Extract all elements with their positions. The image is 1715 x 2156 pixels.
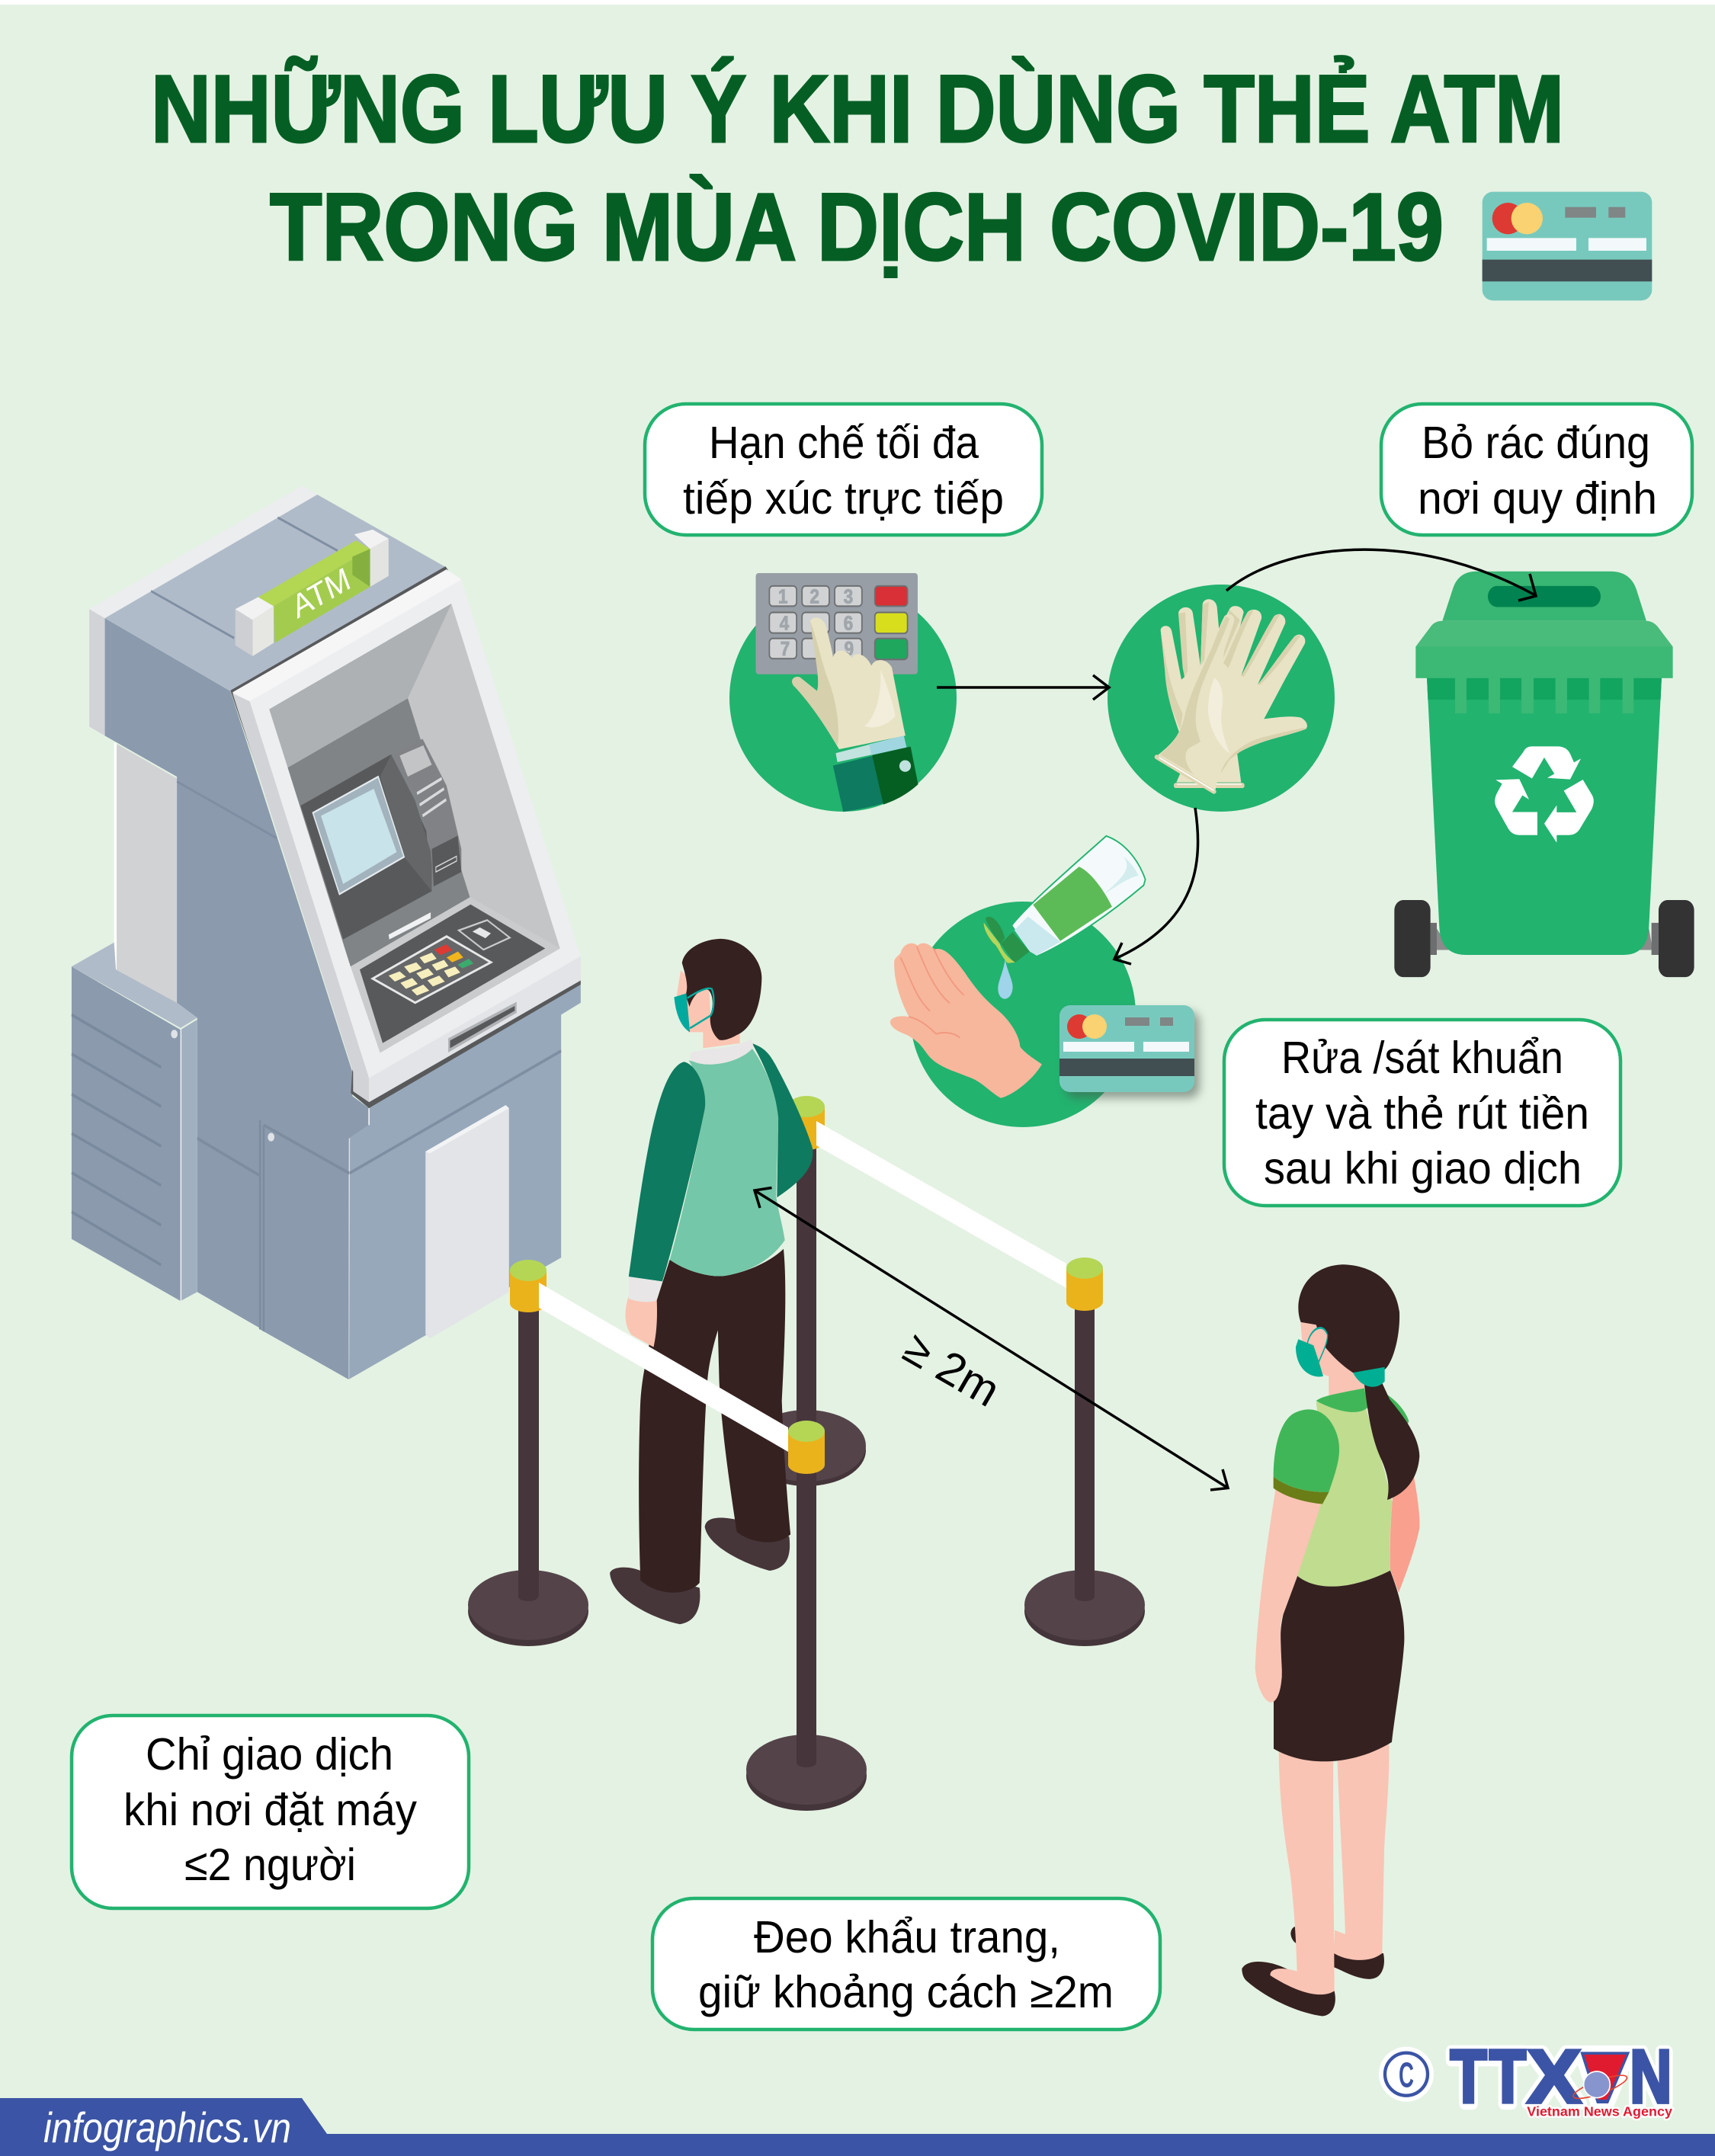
arrow: gloves to bin	[1226, 549, 1536, 601]
keypad	[756, 573, 918, 674]
woman right arm	[1390, 1477, 1419, 1593]
woman shoes	[1242, 1926, 1384, 2016]
arrow: keypad to gloves	[937, 675, 1109, 700]
front glove	[1156, 610, 1307, 794]
callout: limit direct contact	[645, 404, 1042, 535]
man mask	[674, 988, 713, 1032]
copyright mark	[1379, 2047, 1434, 2102]
callout: two people limit: ≤2 người	[184, 1840, 356, 1890]
icon: bank card in title	[1483, 192, 1652, 300]
illustration: ATM machine	[72, 485, 581, 1379]
callout: wash hands and card	[1224, 1020, 1620, 1206]
ATM cash machine	[300, 738, 461, 940]
icon: sanitiser bottle	[984, 836, 1146, 999]
title	[151, 56, 1564, 280]
bin body	[1427, 678, 1662, 955]
callout: two people limit: khi nơi đặt máy	[123, 1785, 417, 1835]
man trousers	[639, 1249, 790, 1593]
callout: wash hands and card: Rửa /sát khuẩn	[1281, 1033, 1563, 1083]
keypad: 3	[844, 586, 853, 608]
callout: dispose waste: Bỏ rác đúng	[1422, 418, 1650, 468]
ATM sign	[236, 530, 389, 656]
agency wordmark: N	[1630, 2035, 1672, 2119]
ATM lower door	[197, 1120, 349, 1379]
ribbon: back barrier	[816, 1121, 1066, 1288]
keypad: 4	[780, 613, 790, 635]
agency wordmark	[1451, 2035, 1672, 2119]
ATM sign label: ATM	[287, 560, 354, 626]
ATM side box	[72, 943, 197, 1301]
woman hair	[1298, 1264, 1399, 1373]
icon: bank card small	[1059, 1005, 1200, 1098]
callout: two people limit	[72, 1716, 469, 1908]
keypad: 6	[844, 613, 853, 635]
stanchion: left	[468, 1260, 588, 1646]
panel: gloves circle	[1108, 585, 1335, 812]
callout: wash hands and card: sau khi giao dịch	[1264, 1143, 1582, 1193]
wordmark outline: X	[1527, 2036, 1581, 2119]
bin ribs	[1455, 678, 1633, 713]
keypad: 2	[810, 586, 819, 608]
bin lid	[1415, 572, 1673, 678]
callout: mask and distance	[652, 1898, 1160, 2029]
man hair	[682, 939, 761, 1040]
arrow: 2 metre distance	[755, 1187, 1228, 1490]
woman neck and face	[1300, 1320, 1366, 1395]
man cuff	[629, 1277, 662, 1302]
man vest	[670, 1048, 785, 1277]
illustration: woman in queue	[1242, 1264, 1419, 2016]
agency wordmark: X	[1527, 2035, 1581, 2119]
callout: two people limit: Chỉ giao dịch	[146, 1729, 393, 1780]
icon: rubber gloves	[1156, 599, 1307, 794]
agency wordmark: T	[1489, 2035, 1526, 2119]
stanchion: front centre	[746, 1471, 867, 1811]
green circle 1	[729, 585, 957, 812]
woman scrunchie	[1353, 1367, 1385, 1387]
panel: touch circle	[729, 573, 957, 812]
panel: sanitising circle	[890, 836, 1200, 1127]
wordmark outline	[1451, 2036, 1672, 2119]
callout: dispose waste: nơi quy định	[1418, 473, 1657, 524]
wordmark outline: T	[1489, 2036, 1526, 2119]
shirt cuff	[835, 735, 906, 762]
woman back sleeve	[1382, 1392, 1409, 1477]
woman top	[1297, 1402, 1393, 1587]
icon: keypad and gloved hand	[756, 573, 918, 812]
sanitiser drop	[998, 959, 1013, 999]
wordmark outline: N	[1630, 2036, 1672, 2119]
agency wordmark: T	[1451, 2035, 1487, 2119]
callout: wash hands and card: tay và thẻ rút tiền	[1255, 1088, 1589, 1139]
title: TRONG MÙA DỊCH COVID-19	[270, 175, 1444, 280]
ATM lower front	[348, 985, 581, 1379]
callout: dispose waste	[1381, 404, 1692, 535]
callout: mask and distance: Đeo khẩu trang,	[754, 1912, 1060, 1962]
green circle 2	[1108, 585, 1335, 812]
ATM screen housing	[230, 566, 581, 1108]
man neck and face	[677, 970, 740, 1048]
man right sleeve	[752, 1043, 813, 1197]
stanchion: right	[1024, 1257, 1145, 1646]
footer band	[0, 2098, 1715, 2156]
bin wheels	[1394, 900, 1694, 977]
illustration: man in queue	[610, 939, 813, 1624]
ATM pillar	[116, 744, 177, 1003]
keypad: 7	[781, 639, 790, 661]
woman sleeve	[1274, 1409, 1339, 1492]
woman legs	[1271, 1742, 1389, 1994]
callout: limit direct contact: tiếp xúc trực tiếp	[683, 473, 1004, 524]
callout: mask and distance: giữ khoảng cách ≥2m	[698, 1967, 1114, 2017]
arrow: gloves to sanitising	[1114, 808, 1198, 964]
callout: limit direct contact: Hạn chế tối đa	[709, 418, 979, 468]
footer website: infographics.vn	[43, 2103, 291, 2151]
agency tagline: Vietnam News Agency	[1527, 2104, 1672, 2119]
ATM keypad	[373, 920, 516, 1050]
woman left arm	[1255, 1490, 1322, 1703]
ATM screen	[313, 777, 404, 894]
ATM body side	[105, 618, 369, 1379]
wordmark outline: T	[1451, 2036, 1487, 2119]
man left sleeve	[629, 1062, 705, 1282]
icon: open hand	[890, 943, 1042, 1098]
woman skirt	[1274, 1571, 1404, 1761]
man hand	[625, 1296, 657, 1347]
woman ponytail	[1364, 1383, 1419, 1500]
copyright mark: C	[1399, 2055, 1414, 2094]
ribbon: left barrier	[539, 1283, 788, 1452]
distance label: ≥ 2m	[895, 1321, 1008, 1417]
illustration: recycling bin	[1394, 572, 1694, 977]
green circle 3	[910, 902, 1136, 1127]
ATM white door panel	[425, 1105, 509, 1338]
woman collar	[1316, 1388, 1368, 1412]
man collar	[690, 1039, 754, 1065]
icon: recycling symbol	[1495, 746, 1594, 843]
stanchion: back centre	[747, 1096, 866, 1486]
back glove	[1161, 599, 1245, 788]
stanchion cap: front centre	[788, 1421, 825, 1474]
ATM top slab	[89, 485, 317, 618]
keypad: 1	[778, 586, 787, 608]
keypad: 9	[845, 639, 854, 661]
red V and globe	[1571, 2052, 1630, 2103]
logo: TTXVN	[1379, 2035, 1672, 2119]
woman mask	[1296, 1328, 1328, 1376]
jacket sleeve	[833, 747, 918, 812]
man shoes	[610, 1517, 790, 1624]
gloved hand	[792, 617, 906, 749]
